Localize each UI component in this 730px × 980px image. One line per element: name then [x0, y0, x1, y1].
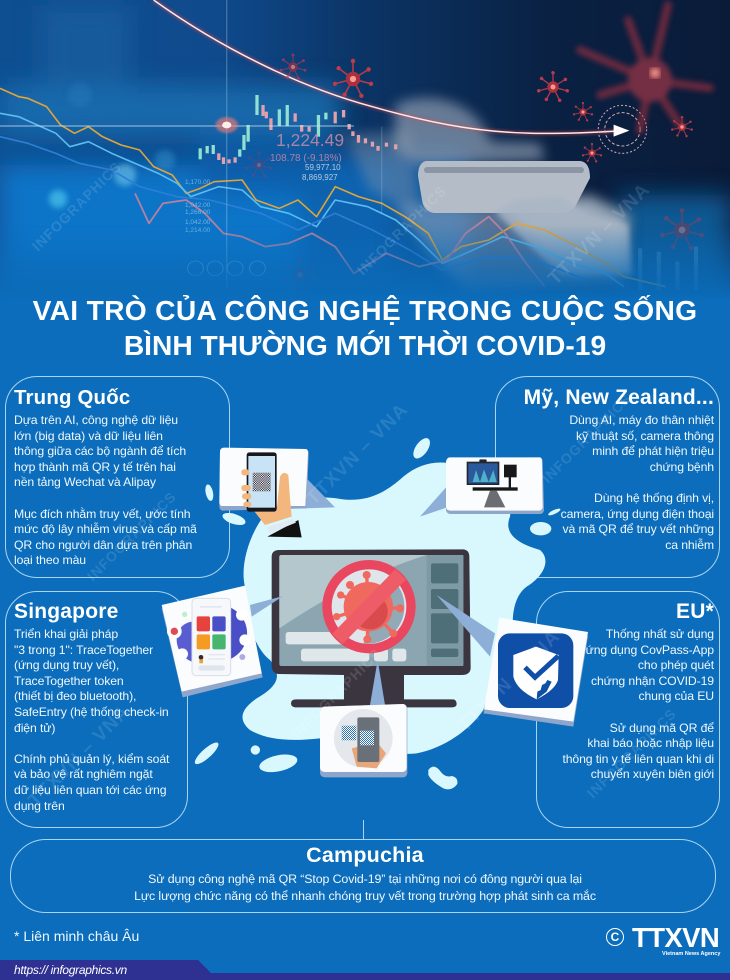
text: Trung Quoc — [14, 413, 197, 567]
candlesticks — [200, 95, 396, 164]
text: Singapore: TraceTogether token — [14, 674, 124, 688]
text: Singapore: dụng trên — [14, 799, 65, 813]
hero image: virus and falling market chart: 1,042.00 — [185, 202, 211, 209]
heading: Campuchia: Campuchia — [306, 843, 424, 867]
hero image: virus and falling market chart: 1,170.00 — [185, 179, 211, 186]
text: Trung Quoc: hợp thành mã QR y tế trên hai — [14, 460, 176, 474]
text: EU — [562, 627, 714, 781]
watermarks: INFOGRAPHICS — [354, 182, 449, 278]
text: EU: chứng nhận COVID-19 — [591, 674, 714, 688]
hero chart numbers: 108.78 (-9.18%) — [270, 153, 342, 164]
text: My, New Zealand — [561, 413, 714, 552]
lower rings — [188, 261, 265, 276]
grid and curve — [0, 125, 354, 127]
text: Trung Quoc: lớn (big data) và dữ liệu liên — [14, 429, 163, 443]
footnote: * Liên minh châu Âu — [14, 928, 139, 944]
watermarks: INFOGRAPHICS — [29, 158, 124, 254]
text: EU: thông tin y tế liên quan khi di — [562, 752, 714, 766]
text: Campuchia: Lực lượng chức năng có thể nhanh chóng truy vết trong trường hợp phát sinh ca mắc — [134, 888, 596, 902]
bars bottom right — [640, 247, 696, 290]
logo: TTXVN — [606, 922, 720, 957]
title — [32, 294, 697, 361]
text: Trung Quoc: nền tảng Wechat và Alipay — [14, 475, 156, 489]
text: EU: Thống nhất sử dụng — [606, 627, 714, 641]
text: Trung Quoc: QR cho người dân dựa trên phân — [14, 538, 192, 552]
panel: EU — [536, 591, 720, 828]
watermarks: TTXVN – VNA — [544, 179, 654, 289]
text: My, New Zealand: ca nhiễm — [665, 538, 714, 552]
monitor — [272, 549, 471, 707]
text: EU: ứng dụng CovPass-App — [586, 643, 714, 657]
logo: TTXVN: C — [611, 930, 619, 944]
card: Singapore app — [162, 586, 283, 697]
text: Trung Quoc: thông giữa các bộ ngành để tích — [14, 444, 186, 458]
watermarks: TTXVN – VNA — [302, 399, 412, 509]
hero chart numbers: 1,224.49 — [276, 130, 344, 150]
heading: EU: EU* — [676, 600, 714, 623]
text: Trung Quoc: loại theo màu — [14, 553, 86, 567]
logo: TTXVN: TTXVN — [632, 922, 719, 953]
watermarks: INFOGRAPHICS — [539, 390, 634, 486]
phone — [418, 161, 632, 275]
text: My, New Zealand: minh để phát hiện triệu — [592, 444, 714, 458]
watermarks: INFOGRAPHICS — [289, 645, 384, 741]
card: CovPass app — [437, 595, 588, 727]
text: My, New Zealand: chứng bệnh — [650, 460, 714, 474]
text: Singapore: điện tử) — [14, 721, 55, 735]
heading: Trung Quoc: Trung Quốc — [14, 387, 130, 409]
text: My, New Zealand: camera, ứng dụng điện thoại — [561, 507, 714, 521]
text: EU: chung của EU — [638, 689, 714, 703]
text: Singapore: "3 trong 1": TraceTogether — [14, 643, 153, 657]
card: hand with QR phone — [219, 448, 335, 537]
panel: Campuchia — [10, 820, 716, 913]
title: VAI TRÒ CỦA CÔNG NGHỆ TRONG CUỘC SỐNG — [33, 294, 697, 326]
card: camera thermometer — [420, 457, 544, 517]
watermarks: INFOGRAPHICS — [84, 488, 179, 584]
hero image: virus and falling market chart: 8,869,927 — [302, 173, 338, 182]
hero image: virus and falling market chart: 1,042.00 — [185, 219, 211, 226]
footer url: https:// infographics.vn — [14, 963, 127, 977]
logo: TTXVN: Vietnam News Agency — [662, 951, 720, 957]
text: EU: cho phép quét — [638, 658, 714, 672]
text: Singapore: Triển khai giải pháp — [14, 627, 118, 641]
text: Trung Quoc: mức độ lây nhiễm virus và cấp mã — [14, 522, 197, 536]
text: Singapore: (ứng dụng truy vết), — [14, 658, 119, 672]
heading: Singapore: Singapore — [14, 600, 118, 623]
text: Singapore: dữ liệu liên quan tới các ứng — [14, 783, 166, 797]
chart lines — [0, 88, 666, 287]
panel: My, New Zealand — [495, 376, 720, 578]
large blurred virus — [580, 5, 710, 130]
text: Campuchia: Sử dụng công nghệ mã QR “Stop Covid-19” tại những nơi có đông người qua lại — [148, 872, 582, 886]
hero image: virus and falling market chart: 1,266.00 — [185, 209, 211, 216]
hero image: virus and falling market chart: 59,977.10 — [305, 163, 341, 172]
panel: Trung Quoc — [5, 376, 230, 578]
text: Trung Quoc: Mục đích nhằm truy vết, ước tính — [14, 507, 190, 521]
hero image: virus and falling market chart: 1,214.00 — [185, 227, 211, 234]
watermarks: TTXVN – VNA — [454, 626, 564, 736]
text: Campuchia — [134, 872, 596, 902]
text: Singapore: SafeEntry (hệ thống check-in — [14, 705, 169, 719]
text: My, New Zealand: Dùng AI, máy đo thân nhiệt — [569, 413, 714, 427]
hero chart numbers — [270, 130, 344, 164]
hero image: virus and falling market chart — [0, 0, 730, 295]
text: Singapore: (thiết bị đeo bluetooth), — [14, 689, 136, 703]
text: Singapore: và bảo vệ rất nghiêm ngặt — [14, 767, 153, 781]
text: EU: khai báo hoặc nhập liệu — [587, 736, 714, 750]
text: Singapore — [14, 627, 170, 813]
text: Trung Quoc: Dựa trên AI, công nghệ dữ liệu — [14, 413, 178, 427]
no-virus sign — [322, 560, 416, 653]
small viruses — [246, 54, 703, 290]
text: My, New Zealand: Dùng hệ thống định vị, — [594, 491, 714, 505]
text: My, New Zealand: kỹ thuật số, camera thông — [576, 429, 714, 443]
panel: Singapore — [5, 591, 188, 828]
watermarks: INFOGRAPHICS — [584, 705, 679, 801]
text: My, New Zealand: và mã QR để truy vết những — [563, 522, 714, 536]
text: Singapore: Chính phủ quản lý, kiểm soát — [14, 752, 169, 766]
text: EU: Sử dụng mã QR để — [610, 721, 714, 735]
watermarks: TTXVN – VNA — [24, 701, 134, 811]
blurred hand — [345, 98, 630, 295]
text: EU: chuyển xuyên biên giới — [591, 767, 714, 781]
heading: My, New Zealand: Mỹ, New Zealand... — [524, 386, 714, 409]
splash blob — [192, 435, 561, 789]
card: QR scan — [320, 660, 407, 777]
title: BÌNH THƯỜNG MỚI THỜI COVID-19 — [124, 329, 606, 361]
